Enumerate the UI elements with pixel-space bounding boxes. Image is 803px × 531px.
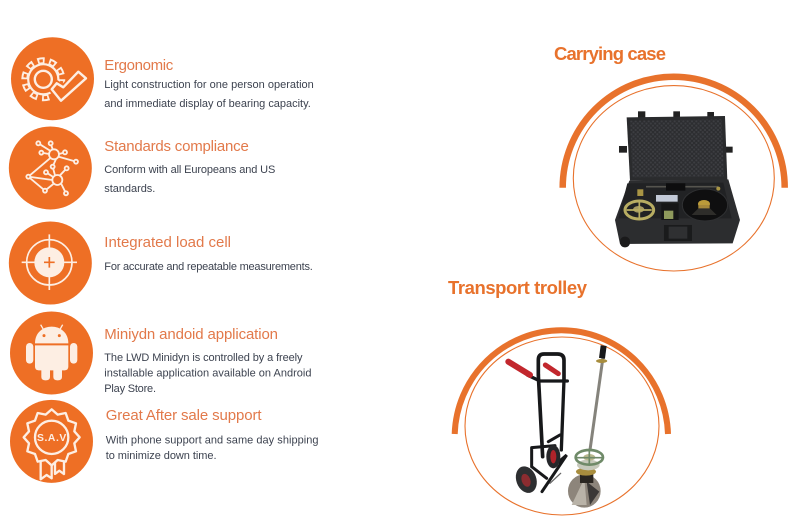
text: standards description: Conform with all Europeans and US	[104, 164, 275, 176]
panel: android application	[10, 311, 312, 395]
text: after sale description: With phone support and same day shipping	[106, 434, 318, 446]
text: android description: The LWD Minidyn is controlled by a freely	[104, 352, 303, 364]
icon: S.A.V badge	[10, 400, 93, 483]
heading: carrying case: Carrying case	[554, 43, 666, 64]
heading: integrated load cell: Integrated load cell	[104, 234, 231, 251]
text: after sale description: to minimize down time.	[106, 450, 216, 462]
icon: network nodes	[9, 126, 92, 209]
heading: after sale support: Great After sale support	[106, 407, 262, 424]
icon: S.A.V badge: S.A.V	[37, 433, 66, 444]
icon: android robot	[10, 311, 93, 394]
text: after sale description	[106, 434, 318, 462]
icon: target	[9, 221, 92, 304]
text: ergonomic description: and immediate display of bearing capacity.	[104, 98, 311, 110]
heading: ergonomic: Ergonomic	[104, 57, 174, 74]
text: ergonomic description: Light construction for one person operation	[104, 79, 314, 91]
icon: gear with check mark	[11, 37, 94, 120]
heading: standards compliance: Standards compliance	[104, 138, 249, 155]
thick orange arc	[563, 77, 785, 188]
text: android description: Play Store.	[104, 383, 156, 395]
heading: android application: Miniydn andoid application	[104, 326, 278, 343]
thick orange arc	[455, 330, 668, 434]
text: standards description: standards.	[104, 183, 155, 195]
thin orange ellipse	[573, 86, 774, 271]
heading: transport trolley: Transport trolley	[448, 277, 588, 298]
panel: integrated load cell	[9, 221, 313, 304]
panel: carrying case	[554, 43, 785, 271]
image: trolley and Minidyn device	[508, 346, 607, 508]
panel: ergonomic	[11, 37, 314, 120]
text: android description	[104, 352, 312, 395]
text: android description: installable application available on Android	[104, 368, 312, 380]
text: standards description	[104, 164, 275, 195]
panel: after sale support	[10, 400, 319, 483]
panel: transport trolley	[448, 277, 668, 515]
text: load cell description: For accurate and repeatable measurements.	[104, 261, 313, 273]
thin orange ellipse	[465, 337, 659, 515]
image: open carrying case	[615, 111, 740, 247]
panel: standards compliance	[9, 126, 275, 209]
text: ergonomic description	[104, 79, 314, 110]
